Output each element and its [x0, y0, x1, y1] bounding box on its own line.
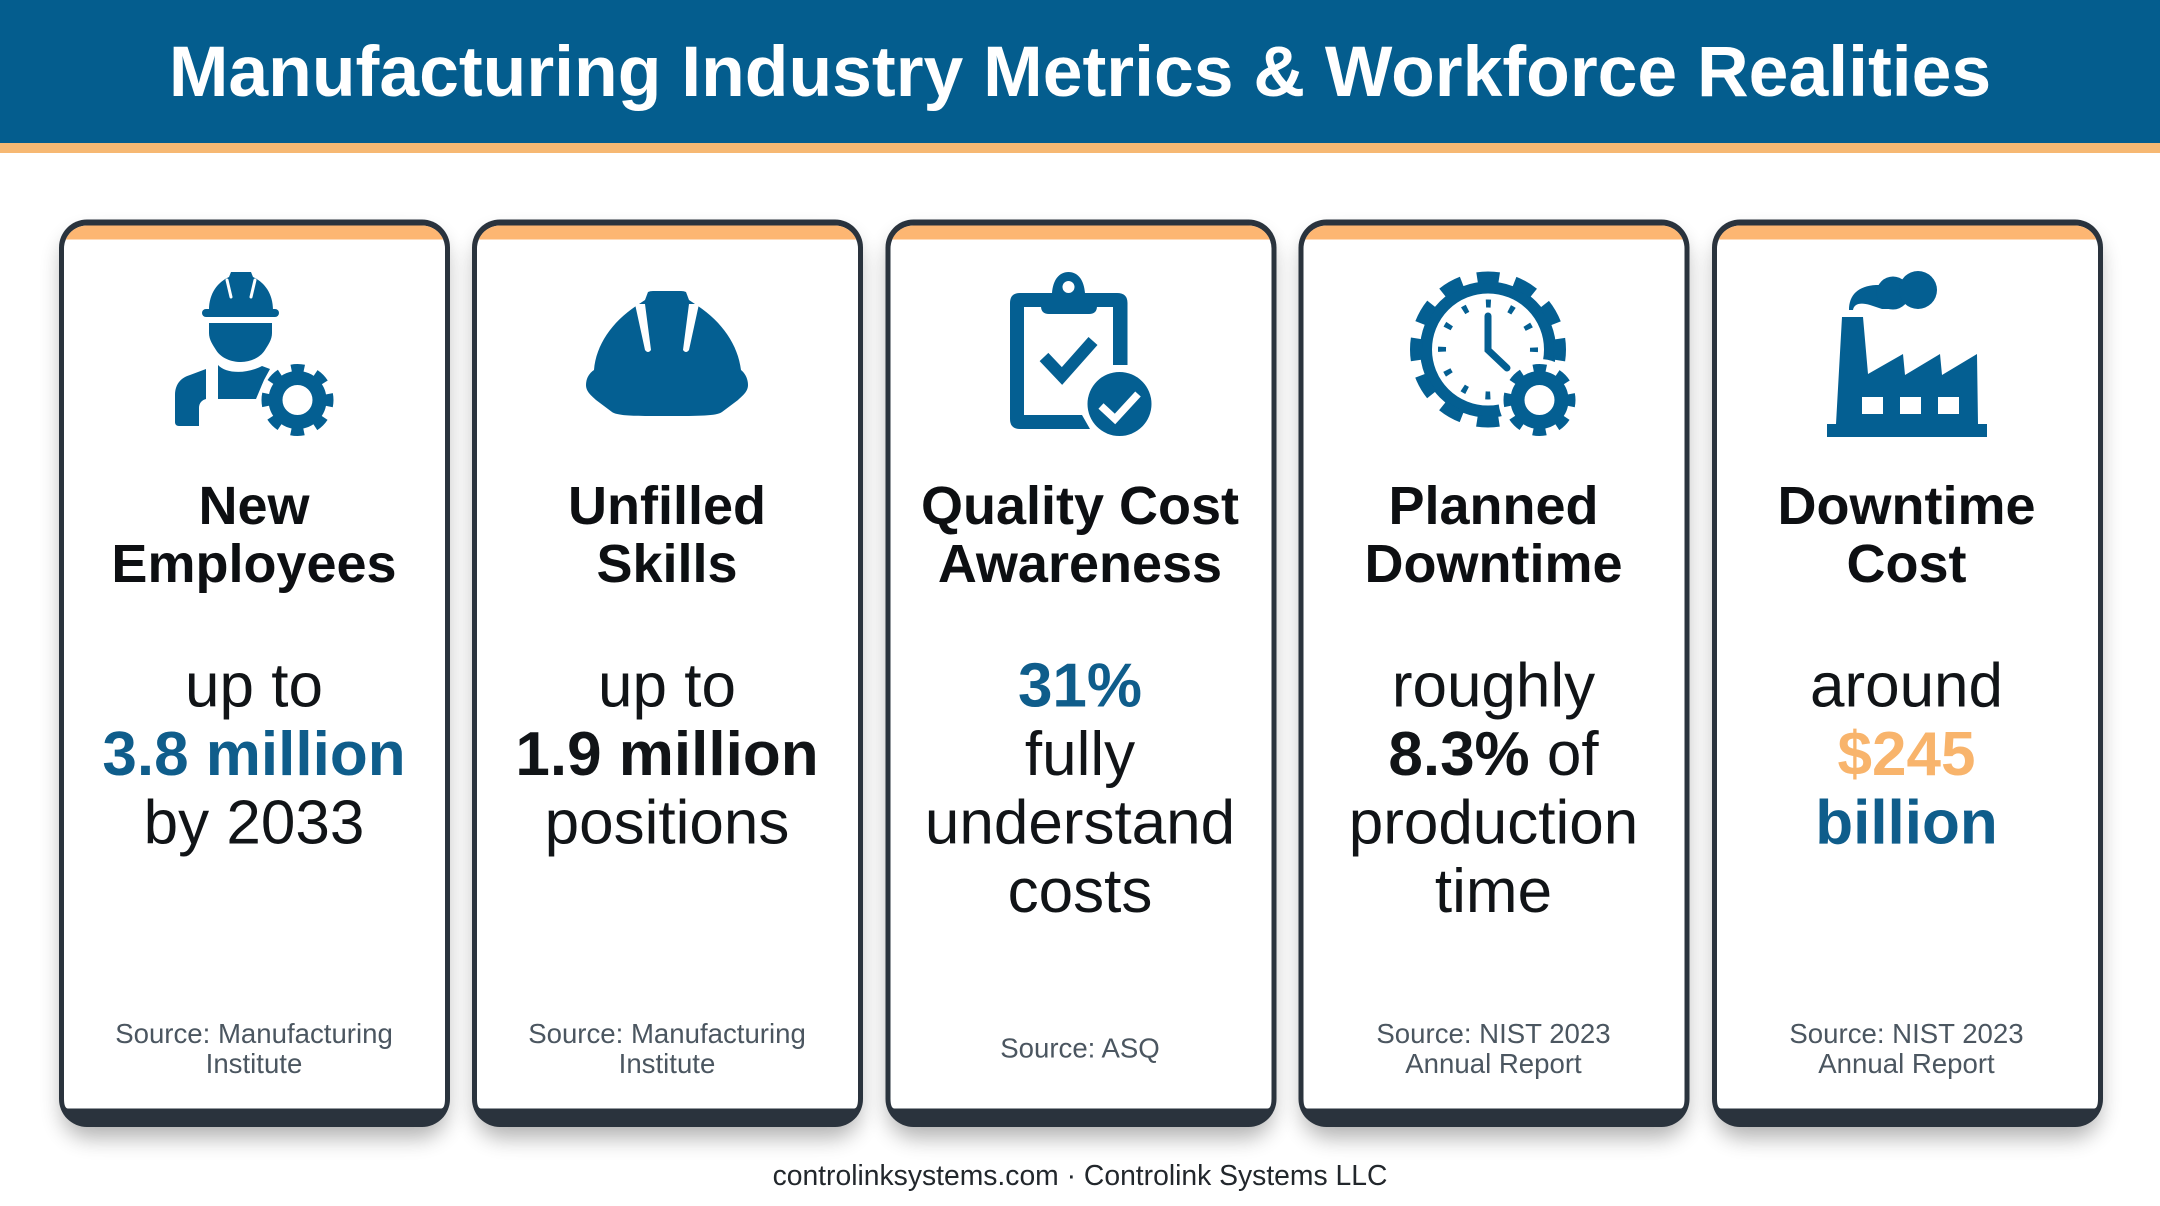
source: Source: Manufacturing: [115, 1018, 393, 1049]
metric text: around: [1810, 652, 2003, 720]
metric text: time: [1435, 857, 1552, 926]
card frame: [1298, 220, 1690, 1127]
panel: quality cost awareness: [886, 220, 1276, 1138]
metric text: production: [1349, 788, 1638, 858]
metric text: costs: [1008, 857, 1152, 926]
metric text: fully: [1025, 720, 1135, 789]
icon: factory: [1827, 271, 1987, 437]
source: Annual Report: [1405, 1048, 1582, 1079]
heading: Awareness: [938, 534, 1222, 594]
metric text: 3.8 million: [102, 720, 406, 789]
source: Source: ASQ: [1000, 1032, 1160, 1064]
heading: Skills: [596, 534, 738, 594]
heading: Planned: [1388, 476, 1599, 536]
panel: planned downtime: [1298, 220, 1690, 1138]
source: Annual Report: [1818, 1048, 1995, 1079]
heading: Downtime: [1777, 476, 2036, 536]
heading: Downtime: [1364, 534, 1623, 594]
card frame: [886, 220, 1276, 1127]
heading: Unfilled: [568, 476, 766, 536]
metric text: 31%: [1018, 652, 1142, 720]
source: Institute: [206, 1048, 302, 1079]
metric text: positions: [545, 788, 789, 858]
icon: clock in gear: [1416, 278, 1580, 441]
metric text: roughly: [1392, 652, 1595, 720]
metric text: billion: [1815, 788, 1998, 858]
metric text: 8.3% of: [1388, 720, 1599, 789]
card frame: [472, 220, 863, 1127]
panel: unfilled skills: [472, 220, 863, 1138]
icon: hard hat: [586, 291, 748, 416]
metric text: by 2033: [144, 788, 364, 858]
metric text: understand: [925, 788, 1235, 858]
icon: clipboard with check: [1010, 272, 1152, 436]
footer credit: controlinksystems.com · Controlink Systems LLC: [773, 1159, 1387, 1191]
card frame: [1712, 220, 2103, 1127]
source: Source: NIST 2023: [1789, 1018, 2024, 1049]
metric text: up to: [185, 652, 323, 720]
metric text: $245: [1838, 720, 1975, 789]
panel: new employees: [59, 220, 450, 1138]
heading: Employees: [111, 534, 397, 594]
source: Institute: [619, 1048, 715, 1079]
metric text: up to: [598, 652, 736, 720]
card frame: [59, 220, 450, 1127]
source: Source: NIST 2023: [1376, 1018, 1611, 1049]
icon: worker with gear: [175, 272, 336, 438]
metric text: 1.9 million: [515, 720, 819, 789]
header banner: [0, 0, 2160, 153]
heading: Cost: [1846, 534, 1967, 594]
title: Manufacturing Industry Metrics & Workforce Realities: [169, 32, 1991, 112]
panel: downtime cost: [1712, 220, 2103, 1138]
source: Source: Manufacturing: [528, 1018, 806, 1049]
heading: Quality Cost: [921, 476, 1239, 536]
heading: New: [198, 476, 311, 536]
